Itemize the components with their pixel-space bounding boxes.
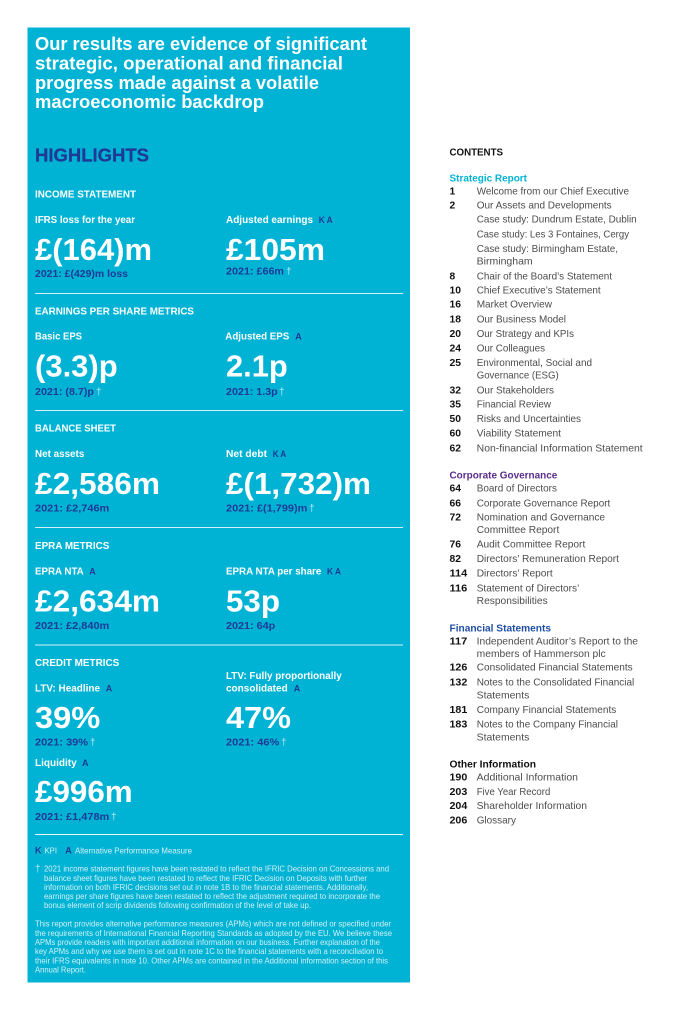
metric: adjusted earnings xyxy=(226,215,333,277)
metric: net debt: † xyxy=(309,504,315,515)
metric: EPRA NTA: EPRA NTA xyxy=(35,567,84,578)
footnote: alternative performance measures: Annual Report. xyxy=(35,966,86,974)
metric: LTV headline xyxy=(35,684,113,749)
metric: EPRA NTA per share: 2021: 64p xyxy=(226,621,275,632)
footnote: restatement xyxy=(35,864,389,910)
panel: highlights xyxy=(28,28,410,982)
metric: LTV fully proportionally consolidated: † xyxy=(281,738,287,749)
contents section: other information xyxy=(450,760,587,826)
contents section: corporate governance: 72 xyxy=(450,512,461,523)
title: macroeconomic backdrop xyxy=(35,91,264,112)
metric: EPRA NTA per share: K A xyxy=(327,567,341,577)
metric: adjusted EPS: 2.1p xyxy=(226,350,288,384)
metric: net debt: £(1,732)m xyxy=(226,467,371,501)
section heading: balance sheet: BALANCE SHEET xyxy=(35,424,116,435)
legend: KPI and APM xyxy=(35,846,192,856)
metric: EPRA NTA: A xyxy=(89,567,96,577)
contents section: strategic report: Risks and Uncertainties xyxy=(477,414,581,425)
contents section: financial statements: 126 xyxy=(450,663,468,674)
metric: LTV headline: A xyxy=(106,684,113,694)
contents section: financial statements: Independent Auditor’s Report to the xyxy=(477,636,638,647)
heading: highlights: HIGHLIGHTS xyxy=(35,146,149,166)
metric: EPRA NTA per share: 53p xyxy=(226,585,280,619)
contents section: strategic report: 18 xyxy=(450,314,461,325)
contents section: strategic report: 50 xyxy=(450,414,461,425)
footnote: restatement: bonus element of scrip dividends following confirmation of the level of take up. xyxy=(44,901,311,910)
contents section: strategic report: Governance (ESG) xyxy=(477,371,559,382)
metric: liquidity: £996m xyxy=(35,775,133,809)
metric: liquidity xyxy=(35,758,133,823)
contents section: strategic report: 2 xyxy=(450,200,456,211)
metric: basic EPS: (3.3)p xyxy=(35,350,118,384)
contents section: corporate governance: Board of Directors xyxy=(477,484,557,495)
contents section: corporate governance: 66 xyxy=(450,498,461,509)
metric: adjusted earnings: † xyxy=(286,266,292,277)
contents section: financial statements: Company Financial Statements xyxy=(477,705,616,716)
legend: KPI and APM: KPI xyxy=(44,847,57,856)
metric: adjusted EPS: † xyxy=(279,387,285,398)
contents section: strategic report xyxy=(450,173,643,454)
contents section: strategic report: Non-financial Information Statement xyxy=(477,443,643,454)
contents section: strategic report: Welcome from our Chief Executive xyxy=(477,186,629,197)
metric: net assets: £2,586m xyxy=(35,467,160,501)
footnote: restatement: earnings per share figures have been restated to reflect the adjustment required to incorporate the xyxy=(44,892,380,901)
metric: net debt xyxy=(226,449,371,515)
section heading: earnings per share: EARNINGS PER SHARE METRICS xyxy=(35,306,194,317)
contents section: other information: 203 xyxy=(450,787,468,798)
metric: adjusted earnings: £105m xyxy=(226,233,325,267)
contents section: other information: Glossary xyxy=(477,815,517,826)
contents section: corporate governance: Corporate Governance Report xyxy=(477,498,610,509)
metric: net assets xyxy=(35,449,160,515)
contents section: strategic report: Our Colleagues xyxy=(477,344,545,355)
contents section: corporate governance: Corporate Governance xyxy=(450,471,558,482)
metric: IFRS loss: £(164)m xyxy=(35,233,152,267)
panel: contents xyxy=(450,148,643,826)
contents section: corporate governance: Directors’ Report xyxy=(477,569,553,580)
heading: contents: CONTENTS xyxy=(450,148,503,159)
contents section: financial statements: 132 xyxy=(450,677,468,688)
contents section: strategic report: 20 xyxy=(450,329,461,340)
title: strategic, operational and financial xyxy=(35,52,343,74)
contents section: corporate governance: Committee Report xyxy=(477,525,559,536)
metric: LTV headline: LTV: Headline xyxy=(35,684,101,695)
contents section: strategic report: Our Strategy and KPIs xyxy=(477,329,574,340)
contents section: strategic report: Strategic Report xyxy=(450,173,528,184)
metric: LTV headline: 39% xyxy=(35,701,100,735)
metric: IFRS loss: IFRS loss for the year xyxy=(35,215,135,226)
footnote: restatement: information on both IFRIC decisions set out in note 1B to the financial statements. Additionally, xyxy=(44,883,368,892)
contents section: financial statements: Notes to the Company Financial xyxy=(477,719,618,730)
footnote: restatement: † xyxy=(35,864,41,875)
metric: basic EPS xyxy=(35,332,118,398)
metric: LTV fully proportionally consolidated: consolidated xyxy=(226,684,288,695)
contents section: strategic report: 35 xyxy=(450,400,461,411)
contents section: strategic report: Our Assets and Developments xyxy=(477,200,612,211)
contents section: strategic report: Chair of the Board’s Statement xyxy=(477,271,612,282)
contents section: strategic report: Our Stakeholders xyxy=(477,385,554,396)
legend: KPI and APM: Alternative Performance Measure xyxy=(75,847,192,856)
contents section: other information: Other Information xyxy=(450,760,536,771)
metric: adjusted EPS: Adjusted EPS xyxy=(225,332,290,343)
contents section: corporate governance: Nomination and Governance xyxy=(477,512,605,523)
contents section: corporate governance: 82 xyxy=(450,554,461,565)
contents section: other information: 190 xyxy=(450,772,468,783)
contents section: strategic report: Market Overview xyxy=(477,300,553,311)
metric: adjusted earnings: K A xyxy=(319,215,333,225)
title xyxy=(35,33,368,112)
contents section: other information: 206 xyxy=(450,815,468,826)
contents section: financial statements: 117 xyxy=(450,636,468,647)
contents section: financial statements: Statements xyxy=(477,732,529,743)
footnote: alternative performance measures: APMs provide readers with important additional information on our business. Further explanation of the xyxy=(35,938,380,947)
footnote: restatement: 2021 income statement figures have been restated to reflect the IFRIC Decision on Concessions and xyxy=(44,865,389,874)
title: progress made against a volatile xyxy=(35,72,319,93)
contents section: strategic report: Case study: Birmingham Estate, xyxy=(477,244,618,255)
metric: LTV headline: † xyxy=(90,738,96,749)
legend: KPI and APM: K xyxy=(35,846,42,856)
metric: EPRA NTA: 2021: £2,840m xyxy=(35,621,110,632)
contents section: financial statements: 181 xyxy=(450,705,468,716)
contents section: other information: Five Year Record xyxy=(477,787,551,798)
footnote: restatement: balance sheet figures have been restated to reflect the IFRIC Decision on Deposits with further xyxy=(44,874,367,883)
contents section: strategic report: 16 xyxy=(450,300,461,311)
contents section: strategic report: Our Business Model xyxy=(477,314,566,325)
contents section: strategic report: Birmingham xyxy=(477,256,533,267)
contents section: strategic report: Case study: Les 3 Fontaines, Cergy xyxy=(477,230,630,241)
metric: liquidity: † xyxy=(111,812,117,823)
metric: LTV fully proportionally consolidated: 47% xyxy=(226,701,291,735)
metric: liquidity: A xyxy=(82,758,89,768)
metric: LTV fully proportionally consolidated xyxy=(226,671,342,749)
contents section: corporate governance xyxy=(450,471,619,607)
contents section: strategic report: Environmental, Social and xyxy=(477,358,592,369)
metric: EPRA NTA xyxy=(35,567,160,632)
contents section: strategic report: 32 xyxy=(450,385,461,396)
metric: basic EPS: 2021: (8.7)p xyxy=(35,387,94,398)
contents section: corporate governance: 76 xyxy=(450,540,461,551)
metric: basic EPS: † xyxy=(96,387,102,398)
metric: LTV fully proportionally consolidated: 2021: 46% xyxy=(226,738,280,749)
metric: EPRA NTA per share xyxy=(226,567,341,632)
contents section: financial statements xyxy=(450,623,638,743)
contents section: strategic report: 24 xyxy=(450,344,461,355)
footnote: alternative performance measures: This report provides alternative performance measures (APMs) which are not defined or specified under xyxy=(35,920,391,929)
footnote: alternative performance measures xyxy=(35,920,392,974)
metric: net debt: Net debt xyxy=(226,449,268,460)
contents section: strategic report: 62 xyxy=(450,443,461,454)
title: Our results are evidence of significant xyxy=(35,33,368,54)
contents section: corporate governance: 116 xyxy=(450,583,468,594)
contents section: financial statements: Statements xyxy=(477,690,529,701)
footnote: alternative performance measures: their IFRS equivalents in note 10. Other APMs are contained in the Additional information section of this xyxy=(35,956,388,965)
footnote: alternative performance measures: the requirements of International Financial Reporting Standards as adopted by the EU. We believe these xyxy=(35,929,392,938)
contents section: corporate governance: Statement of Directors’ xyxy=(477,583,579,594)
metric: basic EPS: Basic EPS xyxy=(35,332,82,343)
metric: IFRS loss: 2021: £(429)m loss xyxy=(35,269,129,280)
contents section: strategic report: 25 xyxy=(450,358,461,369)
metric: adjusted EPS: 2021: 1.3p xyxy=(226,387,278,398)
contents section: strategic report: Chief Executive’s Statement xyxy=(477,286,601,297)
metric: liquidity: Liquidity xyxy=(35,758,77,769)
footnote: alternative performance measures: key APMs and why we use them is set out in note 1C to the financial statements with a reconciliation to xyxy=(35,947,383,956)
contents section: strategic report: 8 xyxy=(450,271,456,282)
metric: EPRA NTA per share: EPRA NTA per share xyxy=(226,567,322,578)
metric: EPRA NTA: £2,634m xyxy=(35,585,160,619)
contents section: financial statements: members of Hammerson plc xyxy=(477,649,606,660)
section heading: credit metrics: CREDIT METRICS xyxy=(35,658,120,669)
contents section: financial statements: Notes to the Consolidated Financial xyxy=(477,677,634,688)
legend: KPI and APM: A xyxy=(65,846,72,856)
contents section: strategic report: 10 xyxy=(450,286,461,297)
metric: net assets: Net assets xyxy=(35,449,85,460)
metric: adjusted earnings: 2021: £66m xyxy=(226,266,284,277)
contents section: other information: 204 xyxy=(450,801,468,812)
contents section: financial statements: Financial Statements xyxy=(450,623,551,634)
contents section: corporate governance: 114 xyxy=(450,569,468,580)
metric: adjusted EPS xyxy=(225,332,302,398)
metric: LTV headline: 2021: 39% xyxy=(35,738,88,749)
metric: net assets: 2021: £2,746m xyxy=(35,504,110,515)
section heading: income statement: INCOME STATEMENT xyxy=(35,190,136,201)
metric: net debt: 2021: £(1,799)m xyxy=(226,504,308,515)
contents section: strategic report: Case study: Dundrum Estate, Dublin xyxy=(477,215,637,226)
section heading: EPRA metrics: EPRA METRICS xyxy=(35,541,110,552)
metric: adjusted EPS: A xyxy=(295,332,302,342)
contents section: corporate governance: 64 xyxy=(450,484,461,495)
metric: LTV fully proportionally consolidated: LTV: Fully proportionally xyxy=(226,671,342,682)
contents section: other information: Additional Information xyxy=(477,772,578,783)
contents section: financial statements: 183 xyxy=(450,719,468,730)
contents section: corporate governance: Directors’ Remuneration Report xyxy=(477,554,619,565)
metric: adjusted earnings: Adjusted earnings xyxy=(226,215,314,226)
metric: liquidity: 2021: £1,478m xyxy=(35,812,110,823)
contents section: corporate governance: Responsibilities xyxy=(477,596,548,607)
contents section: strategic report: 1 xyxy=(450,186,456,197)
contents section: corporate governance: Audit Committee Report xyxy=(477,540,585,551)
contents section: strategic report: 60 xyxy=(450,429,461,440)
metric: net debt: K A xyxy=(273,449,287,459)
contents section: financial statements: Consolidated Financial Statements xyxy=(477,663,633,674)
contents section: strategic report: Financial Review xyxy=(477,400,552,411)
contents section: other information: Shareholder Information xyxy=(477,801,587,812)
contents section: strategic report: Viability Statement xyxy=(477,429,561,440)
metric: IFRS loss xyxy=(35,215,152,280)
metric: LTV fully proportionally consolidated: A xyxy=(294,684,301,694)
